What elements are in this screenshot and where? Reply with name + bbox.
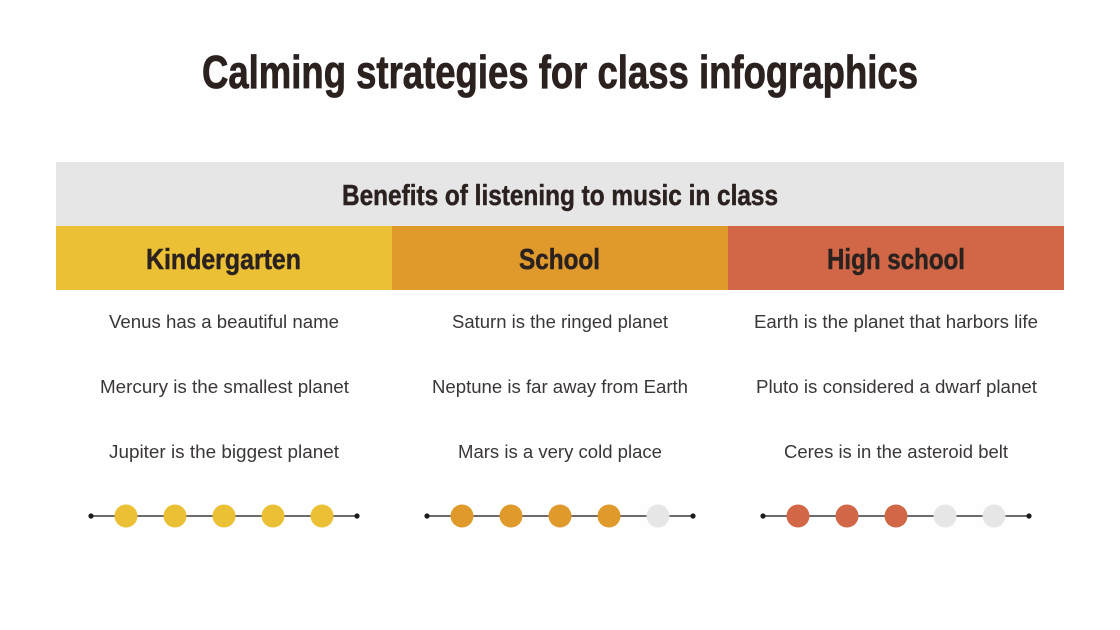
rating: five of five dots — [88, 504, 360, 528]
text: kindergarten items: Mercury is the smallest planet — [100, 377, 349, 397]
rating: three of five dots — [760, 504, 1032, 528]
text: school items — [432, 312, 688, 462]
header: school — [392, 226, 728, 290]
rating: four of five dots — [424, 504, 696, 528]
heading: benefits: Benefits of listening to music in class — [342, 180, 778, 212]
text: high school items: Ceres is in the asteroid belt — [784, 442, 1008, 462]
header: kindergarten — [56, 226, 392, 290]
header: kindergarten: Kindergarten — [146, 244, 301, 276]
header: high school: High school — [827, 244, 965, 276]
text: high school items: Pluto is considered a dwarf planet — [756, 377, 1037, 397]
title: Calming strategies for class infographics — [202, 46, 918, 98]
text: high school items: Earth is the planet that harbors life — [754, 312, 1038, 332]
header: high school — [728, 226, 1064, 290]
text: school items: Saturn is the ringed planet — [452, 312, 668, 332]
text: school items: Neptune is far away from Earth — [432, 377, 688, 397]
panel: high school column — [728, 226, 1064, 528]
panel: school column — [392, 226, 728, 528]
header: school: School — [519, 244, 600, 276]
text: school items: Mars is a very cold place — [458, 442, 662, 462]
text: high school items — [754, 312, 1038, 462]
text: kindergarten items — [100, 312, 349, 462]
panel: kindergarten column — [56, 226, 392, 528]
text: kindergarten items: Jupiter is the biggest planet — [109, 442, 339, 462]
text: kindergarten items: Venus has a beautiful name — [109, 312, 339, 332]
panel: table header — [56, 162, 1064, 226]
